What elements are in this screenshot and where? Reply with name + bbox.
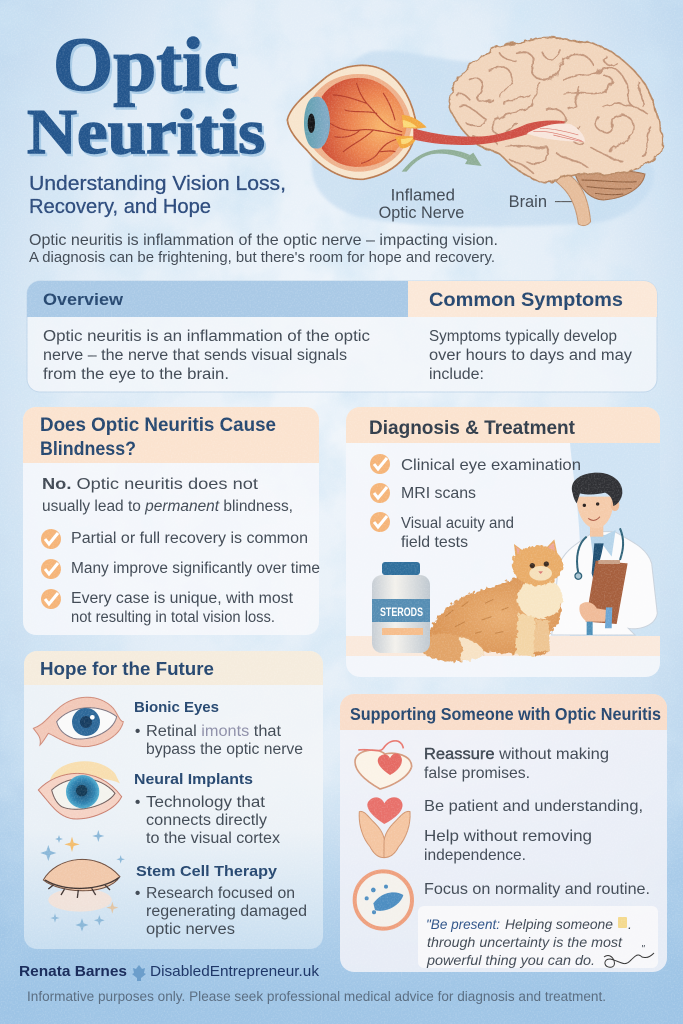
quote box: . (628, 916, 632, 932)
nerve fanning inside brain (527, 123, 585, 142)
icon: two hearts (355, 741, 412, 789)
heading (40, 415, 276, 460)
answer text: usually lead to permanent blindness, (42, 498, 293, 515)
support tips: false promises. (424, 765, 530, 782)
eye and brain illustration (287, 37, 663, 226)
neural implants text: Neural Implants (134, 771, 253, 788)
quote box: Helping someone (505, 916, 613, 932)
support tips: Help without removing (424, 828, 592, 845)
footer credit: DisabledEntrepreneur.uk (150, 964, 320, 980)
heading: Hope for the Future (40, 658, 214, 679)
icon: hands holding heart (359, 797, 410, 858)
checklist: Many improve significantly over time (71, 560, 320, 577)
checklist: Visual acuity and (401, 515, 514, 532)
subtitle: Recovery, and Hope (29, 196, 211, 218)
intro text: Optic neuritis is inflammation of the optic nerve – impacting vision. (29, 232, 498, 249)
quote box: powerful thing you can do. (426, 952, 595, 968)
inflamed optic nerve (413, 121, 565, 145)
stem cell therapy text: • (135, 885, 140, 902)
steroid bottle: STERODS (380, 607, 423, 619)
stem cell therapy text: Research focused on (146, 885, 295, 902)
checklist: Every case is unique, with most (71, 590, 294, 607)
heading: Blindness? (40, 439, 136, 460)
title: Optic (55, 26, 240, 110)
symptoms panel (408, 281, 657, 383)
cat (419, 539, 563, 662)
neural implants text (134, 771, 280, 847)
panel: overview and symptoms (27, 281, 657, 392)
neural implants text: • (135, 794, 140, 811)
footer credit: Renata Barnes (19, 964, 127, 980)
title: Neuritis (27, 97, 265, 167)
stem cell therapy text: Stem Cell Therapy (136, 863, 278, 880)
checklist: Partial or full recovery is common (71, 530, 308, 547)
answer text (42, 476, 293, 515)
checklist: Clinical eye examination (401, 457, 581, 474)
disclaimer: Informative purposes only. Please seek professional medical advice for diagnosis and treatment. (27, 989, 606, 1004)
steroid bottle (372, 562, 430, 653)
bionic eyes text: • (135, 723, 140, 740)
symptoms panel: over hours to days and may (429, 347, 632, 364)
overview panel (27, 281, 408, 383)
neural implants text: to the visual cortex (146, 830, 280, 847)
subtitle (29, 173, 286, 218)
symptoms panel: Symptoms typically develop (429, 328, 617, 345)
support tips (424, 746, 650, 898)
quote box (418, 906, 658, 968)
doctor (552, 473, 657, 635)
quote box: " (641, 944, 645, 955)
icon: closed eye with sparkles (40, 830, 125, 932)
green signal arrow (402, 149, 482, 172)
neural implants text: Technology that (146, 794, 266, 811)
checklist (370, 454, 581, 551)
quote box: "Be present: (426, 916, 500, 932)
title (27, 23, 267, 170)
footer credit (19, 964, 320, 981)
overview panel: Overview (43, 290, 124, 309)
neural implants text: connects directly (146, 812, 267, 829)
nerve label: Optic Nerve (379, 203, 464, 222)
checklist (41, 529, 320, 626)
icon: neural implant eye (38, 761, 122, 819)
overview panel: from the eye to the brain. (43, 366, 229, 383)
icon: leaf badge (355, 871, 412, 929)
checklist: MRI scans (401, 485, 476, 502)
intro text: A diagnosis can be frightening, but there's room for hope and recovery. (29, 249, 495, 266)
symptoms panel: include: (429, 366, 484, 383)
eye (287, 65, 427, 179)
quote box: through uncertainty is the most (427, 934, 623, 950)
title: Neuritis (29, 100, 267, 170)
bionic eyes text (134, 699, 303, 758)
heading: Supporting Someone with Optic Neuritis (350, 704, 661, 724)
support tips: Reassure without making (424, 746, 609, 763)
panel: hope for the future (24, 651, 323, 949)
stem cell therapy text (135, 863, 307, 938)
intro text (29, 232, 498, 266)
icon: bionic eye (33, 697, 123, 747)
brain (449, 37, 663, 226)
nerve label (379, 185, 464, 222)
overview panel: nerve – the nerve that sends visual signals (43, 347, 347, 364)
answer text: No. Optic neuritis does not (42, 476, 259, 493)
heading: Does Optic Neuritis Cause (40, 415, 276, 436)
overview panel: Optic neuritis is an inflammation of the optic (43, 328, 370, 345)
symptoms panel: Common Symptoms (429, 290, 623, 311)
heading: Diagnosis & Treatment (369, 418, 576, 439)
bionic eyes text: bypass the optic nerve (146, 741, 303, 758)
checklist: field tests (401, 534, 468, 551)
bionic eyes text: Retinal imonts that (146, 723, 282, 740)
support tips: Focus on normality and routine. (424, 881, 650, 898)
bionic eyes text: Bionic Eyes (134, 699, 219, 716)
panel: supporting someone (340, 694, 667, 972)
stem cell therapy text: optic nerves (146, 921, 235, 938)
brain label (509, 192, 572, 211)
stem cell therapy text: regenerating damaged (146, 903, 307, 920)
blue blob backdrop (312, 51, 654, 226)
panel: does optic neuritis cause blindness (23, 407, 320, 635)
support tips: independence. (424, 847, 526, 864)
panel: diagnosis and treatment (346, 407, 660, 677)
subtitle: Understanding Vision Loss, (29, 173, 286, 195)
nerve label: Inflamed (391, 185, 455, 204)
checklist: not resulting in total vision loss. (71, 609, 275, 626)
title: Optic (53, 23, 238, 107)
brain label: Brain (509, 192, 547, 211)
support tips: Be patient and understanding, (424, 798, 643, 815)
